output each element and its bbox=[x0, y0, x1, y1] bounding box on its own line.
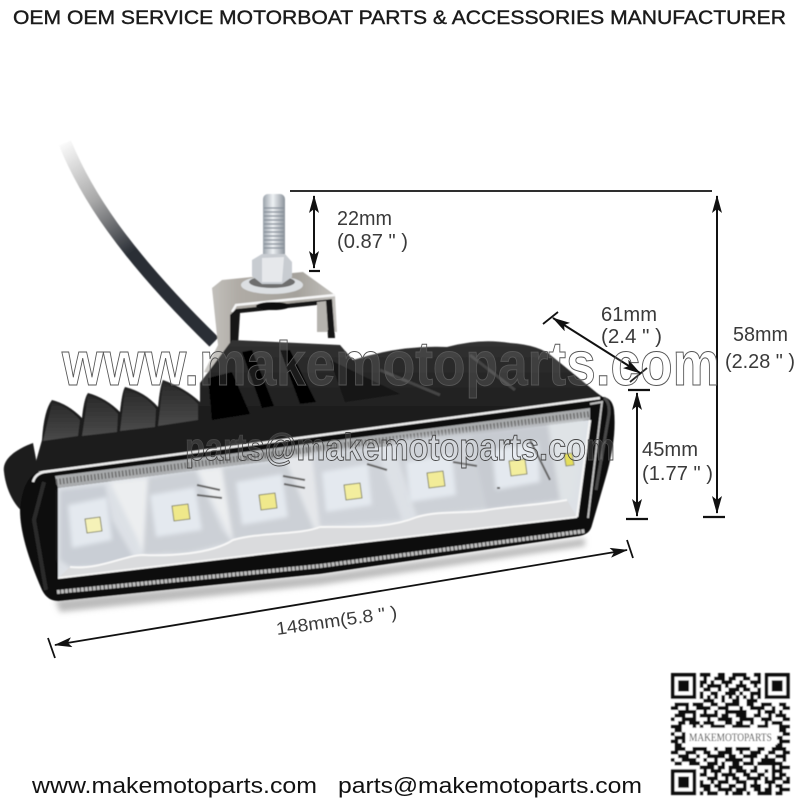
hex nut and washer bbox=[241, 254, 303, 294]
power cable bbox=[65, 143, 214, 342]
lens panel bbox=[58, 420, 590, 578]
steel bracket bbox=[204, 272, 337, 376]
footer contact line: parts@makemotoparts.com bbox=[338, 773, 642, 798]
mounting bolt bbox=[263, 194, 285, 260]
label: 58mm bbox=[725, 324, 795, 373]
dimension: 22mm arrow bbox=[309, 196, 320, 271]
strap behind the lamp bbox=[4, 443, 40, 513]
label: 22mm: (0.87 " ) bbox=[337, 231, 408, 253]
dimension: 61mm arrow bbox=[543, 312, 647, 382]
LED mounting pads bbox=[68, 442, 540, 548]
ground shadow bbox=[55, 538, 585, 612]
label: 61mm: (2.4 " ) bbox=[601, 326, 662, 348]
lens reflector cups bbox=[60, 420, 585, 567]
housing rim highlight bbox=[33, 398, 600, 482]
label: 61mm bbox=[601, 304, 662, 348]
lamp front housing bbox=[20, 397, 615, 601]
LED chips bbox=[85, 453, 574, 533]
watermark: email: parts@makemotoparts.com bbox=[185, 427, 615, 469]
lower light band bbox=[58, 500, 577, 578]
dimension: 148mm arrow bbox=[48, 540, 633, 658]
dimension: 45mm arrow bbox=[626, 390, 650, 519]
heat-sink body bbox=[33, 340, 607, 472]
label: 22mm bbox=[337, 208, 408, 253]
body ridge highlights bbox=[380, 355, 515, 395]
label: 45mm: (1.77 " ) bbox=[642, 463, 713, 485]
label: 22mm: 22mm bbox=[337, 208, 392, 230]
heat-sink slots bbox=[208, 350, 400, 420]
dimension: 58mm reference line and arrow bbox=[290, 191, 725, 517]
lens reflections bbox=[197, 440, 550, 498]
finned reflector strip bbox=[55, 402, 602, 518]
lens bottom edge bbox=[58, 517, 577, 578]
label: 45mm bbox=[642, 439, 713, 485]
title: OEM OEM SERVICE MOTORBOAT PARTS & ACCESSORIES MANUFACTURER bbox=[13, 7, 786, 29]
label: 148mm: 148mm(5.8 " ) bbox=[275, 602, 398, 639]
QR center label: MAKEMOTOPARTS bbox=[689, 731, 772, 744]
lower silver strip bbox=[57, 531, 585, 592]
label: 61mm: 61mm bbox=[601, 304, 657, 326]
lens wave line bbox=[70, 500, 567, 567]
QR code bbox=[671, 673, 790, 795]
label: 58mm: 58mm bbox=[733, 324, 788, 346]
footer contact line bbox=[31, 773, 642, 798]
footer contact line: www.makemotoparts.com bbox=[31, 773, 317, 798]
heat-sink fins bbox=[43, 383, 198, 441]
label: 58mm: (2.28 " ) bbox=[725, 351, 795, 373]
label: 45mm: 45mm bbox=[642, 439, 698, 461]
product photo: LED work light bbox=[4, 143, 615, 612]
